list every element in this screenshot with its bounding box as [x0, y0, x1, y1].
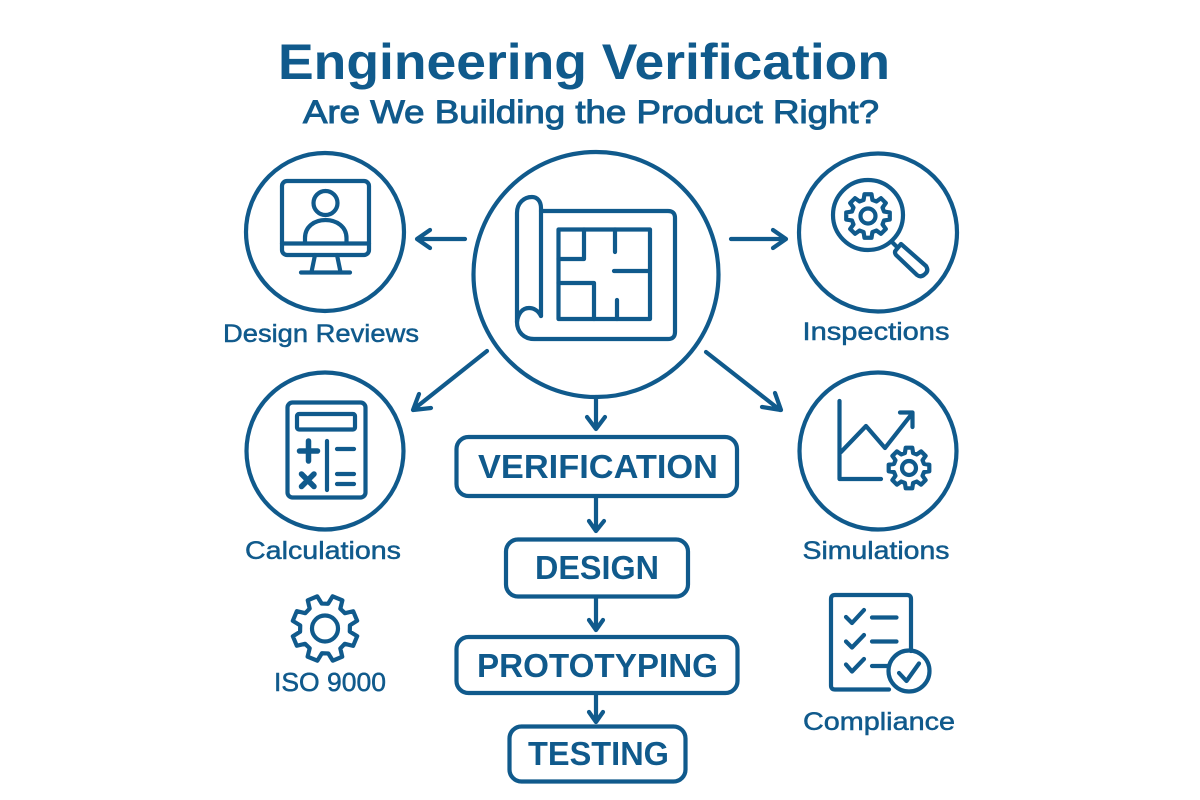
label: ISO 9000: ISO 9000 [274, 667, 386, 697]
box: testing: TESTING [528, 735, 669, 772]
arrow: verification to design [589, 498, 604, 531]
label: compliance: Compliance [803, 708, 955, 736]
label: inspections: Inspections [802, 318, 950, 346]
box: prototyping [456, 637, 738, 693]
central blueprint icon [474, 152, 718, 397]
box: testing [510, 726, 686, 782]
icon: calculations [246, 372, 404, 530]
title: Engineering Verification [278, 34, 890, 90]
arrow: to simulations [706, 352, 781, 410]
arrow: to calculations [413, 351, 487, 410]
box: verification: VERIFICATION [478, 448, 718, 485]
arrow: to verification [587, 397, 605, 429]
arrow: to design reviews [417, 230, 465, 248]
arrow: design to prototyping [589, 598, 603, 630]
arrow: prototyping to testing [589, 694, 603, 722]
box: design [506, 540, 688, 596]
arrow: to inspections [731, 230, 786, 248]
subtitle: Are We Building the Product Right? [303, 94, 879, 130]
label: simulations: Simulations [802, 537, 950, 565]
icon: inspections [799, 154, 957, 312]
label: calculations: Calculations [245, 537, 401, 565]
box: prototyping: PROTOTYPING [477, 647, 718, 684]
icon: ISO 9000 gear [282, 586, 368, 671]
icon: design reviews [246, 153, 404, 311]
icon: compliance checklist [831, 595, 930, 692]
box: verification [456, 437, 737, 496]
box: design: DESIGN [535, 549, 659, 586]
icon: simulations [800, 372, 956, 530]
label: design reviews: Design Reviews [223, 320, 419, 348]
